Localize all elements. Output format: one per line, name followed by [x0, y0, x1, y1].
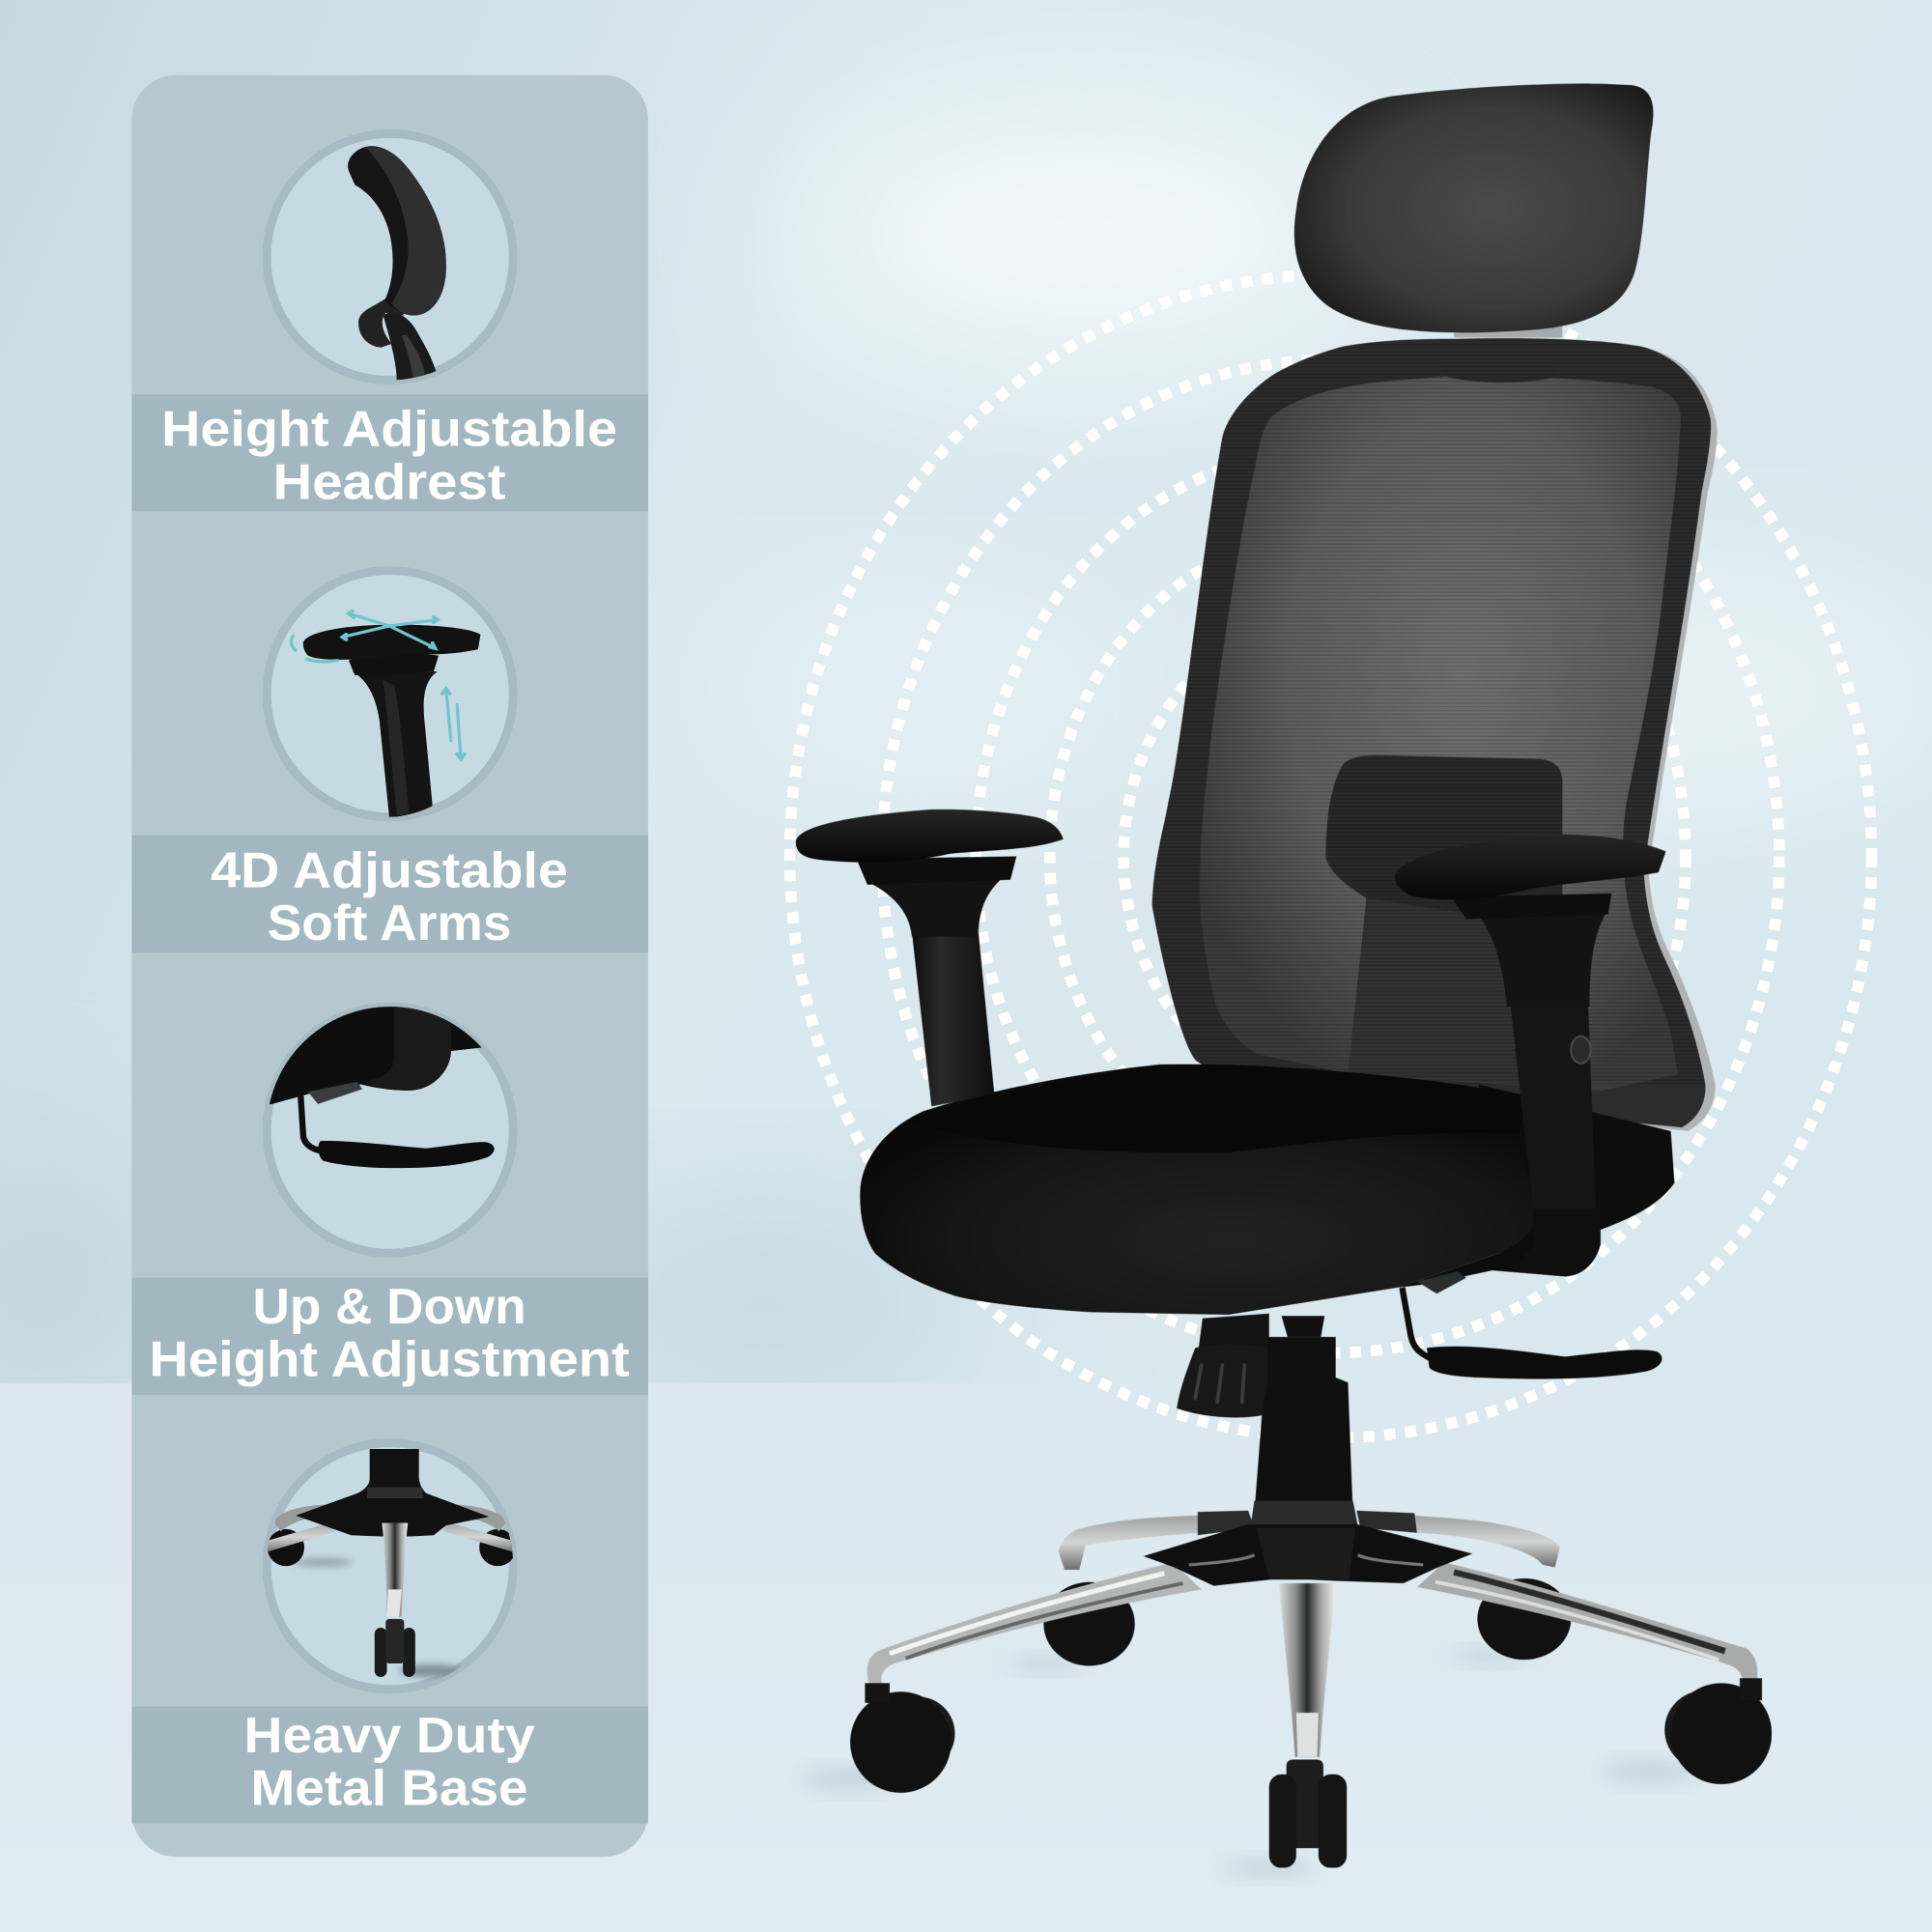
feature label: height adjustable headrest: Headrest	[273, 455, 506, 511]
chair tilt knob	[1177, 1314, 1269, 1417]
center leg	[1279, 1583, 1336, 1757]
feature label: 4D adjustable soft arms	[131, 836, 648, 952]
feature label: up and down height adjustment: Up & Down	[252, 1279, 526, 1335]
chair seat	[860, 1065, 1674, 1315]
icon: 4D direction arrows	[291, 611, 465, 759]
feature label: 4D adjustable soft arms: 4D Adjustable	[211, 842, 568, 898]
front right leg	[1417, 1562, 1757, 1688]
feature label: heavy duty metal base: Metal Base	[251, 1761, 528, 1817]
front left leg	[867, 1562, 1202, 1688]
chair front casters	[850, 1678, 1772, 1868]
feature label: heavy duty metal base	[131, 1707, 648, 1824]
lumbar support pad	[1325, 755, 1562, 1084]
seat tag	[1417, 1271, 1466, 1293]
mesh weave texture	[1152, 340, 1711, 1084]
chair backrest mesh	[1152, 338, 1718, 1131]
feature: up and down height lever	[263, 1003, 518, 1258]
chair headrest	[1294, 84, 1653, 337]
product: office chair	[796, 84, 1772, 1868]
chair gas cylinder	[1251, 1316, 1358, 1525]
feature label: height adjustable headrest	[131, 394, 648, 511]
headrest mount notch	[1441, 366, 1555, 383]
chair height lever	[1403, 1288, 1662, 1378]
feature: 4D adjustable arms	[267, 571, 513, 818]
feature label: height adjustable headrest: Height Adjustable	[161, 402, 617, 458]
chair right armrest	[1395, 835, 1665, 1276]
feature label: 4D adjustable soft arms: Soft Arms	[268, 895, 511, 952]
chair star base	[867, 1511, 1757, 1757]
feature label: up and down height adjustment: Height Adjustment	[149, 1332, 630, 1388]
feature label: heavy duty metal base: Heavy Duty	[244, 1708, 535, 1764]
chair back casters	[1043, 1578, 1571, 1665]
dotted concentric rings	[790, 274, 1872, 1438]
panel: feature sidebar	[131, 75, 648, 1857]
floor shadows under chair	[801, 1651, 1700, 1874]
feature label: up and down height adjustment	[131, 1278, 648, 1395]
chair left armrest	[796, 810, 1064, 1106]
feature: heavy duty metal base	[265, 1443, 516, 1690]
feature: height adjustable headrest	[267, 133, 513, 382]
